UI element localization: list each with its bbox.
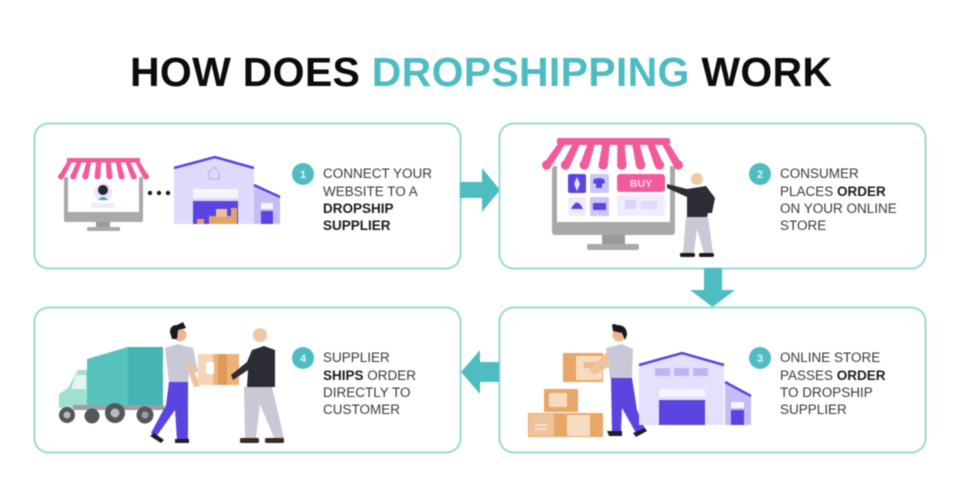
arrow: step 2 to step 3 (690, 268, 735, 307)
icon: delivery truck (59, 347, 164, 424)
badge: step 1: 1 (300, 169, 306, 181)
badge: step 4 (292, 347, 314, 369)
arrow: step 3 to step 4 (461, 350, 499, 394)
text: step 1: CONNECT YOUR (323, 166, 432, 181)
icon: storefront monitor with shop screen (542, 138, 683, 250)
text: step 3: ONLINE STORE (780, 350, 880, 365)
text: step 2: PLACES (780, 184, 837, 199)
panel: step 3 online store passes order (500, 308, 926, 452)
badge: step 3: 3 (757, 353, 763, 365)
text: step 4: SUPPLIER (323, 350, 390, 365)
icon: delivery man (150, 322, 200, 443)
text: step 1: WEBSITE TO A (323, 184, 418, 199)
icon: storefront monitor with shop screen: BUY (630, 178, 652, 190)
icon: bald customer pointing (667, 173, 715, 257)
text: step 3: TO DROPSHIP (780, 385, 873, 400)
badge: step 4: 4 (300, 353, 307, 365)
icon: worker carrying parcel (589, 324, 647, 437)
icon: stacked parcels (528, 353, 603, 437)
text: step 4: DIRECTLY TO (323, 385, 411, 400)
icon: connecting dots (148, 191, 170, 195)
panel: step 2 consumer places order (500, 124, 926, 268)
text: step 3: ORDER (837, 368, 886, 383)
panel: step 1 connect website to supplier (34, 124, 460, 268)
icon: customer receiving parcel (231, 328, 284, 443)
text: step 2: CONSUMER (780, 166, 859, 181)
icon: warehouse (174, 157, 280, 224)
text: step 2: STORE (780, 218, 826, 233)
badge: step 2 (749, 163, 771, 185)
badge: step 3 (749, 347, 771, 369)
icon: parcel (198, 354, 239, 385)
icon: online store monitor (58, 158, 149, 231)
text: step 1: DROPSHIP (323, 201, 394, 216)
icon: warehouse (639, 353, 751, 425)
text: step 4: ORDER (364, 368, 416, 383)
title: HOW DOES DROPSHIPPING WORK (130, 49, 832, 95)
text: step 3: PASSES (780, 368, 837, 383)
text: step 3: SUPPLIER (780, 402, 847, 417)
arrow: step 1 to step 2 (460, 168, 500, 212)
text: step 2: ON YOUR ONLINE (780, 201, 897, 216)
badge: step 1 (292, 163, 314, 185)
text: step 2: ORDER (837, 184, 886, 199)
text: step 4: CUSTOMER (323, 402, 400, 417)
badge: step 2: 2 (757, 169, 763, 181)
text: step 1: SUPPLIER (323, 218, 391, 233)
panel: step 4 supplier ships order (34, 308, 460, 452)
text: step 4: SHIPS (323, 368, 364, 383)
